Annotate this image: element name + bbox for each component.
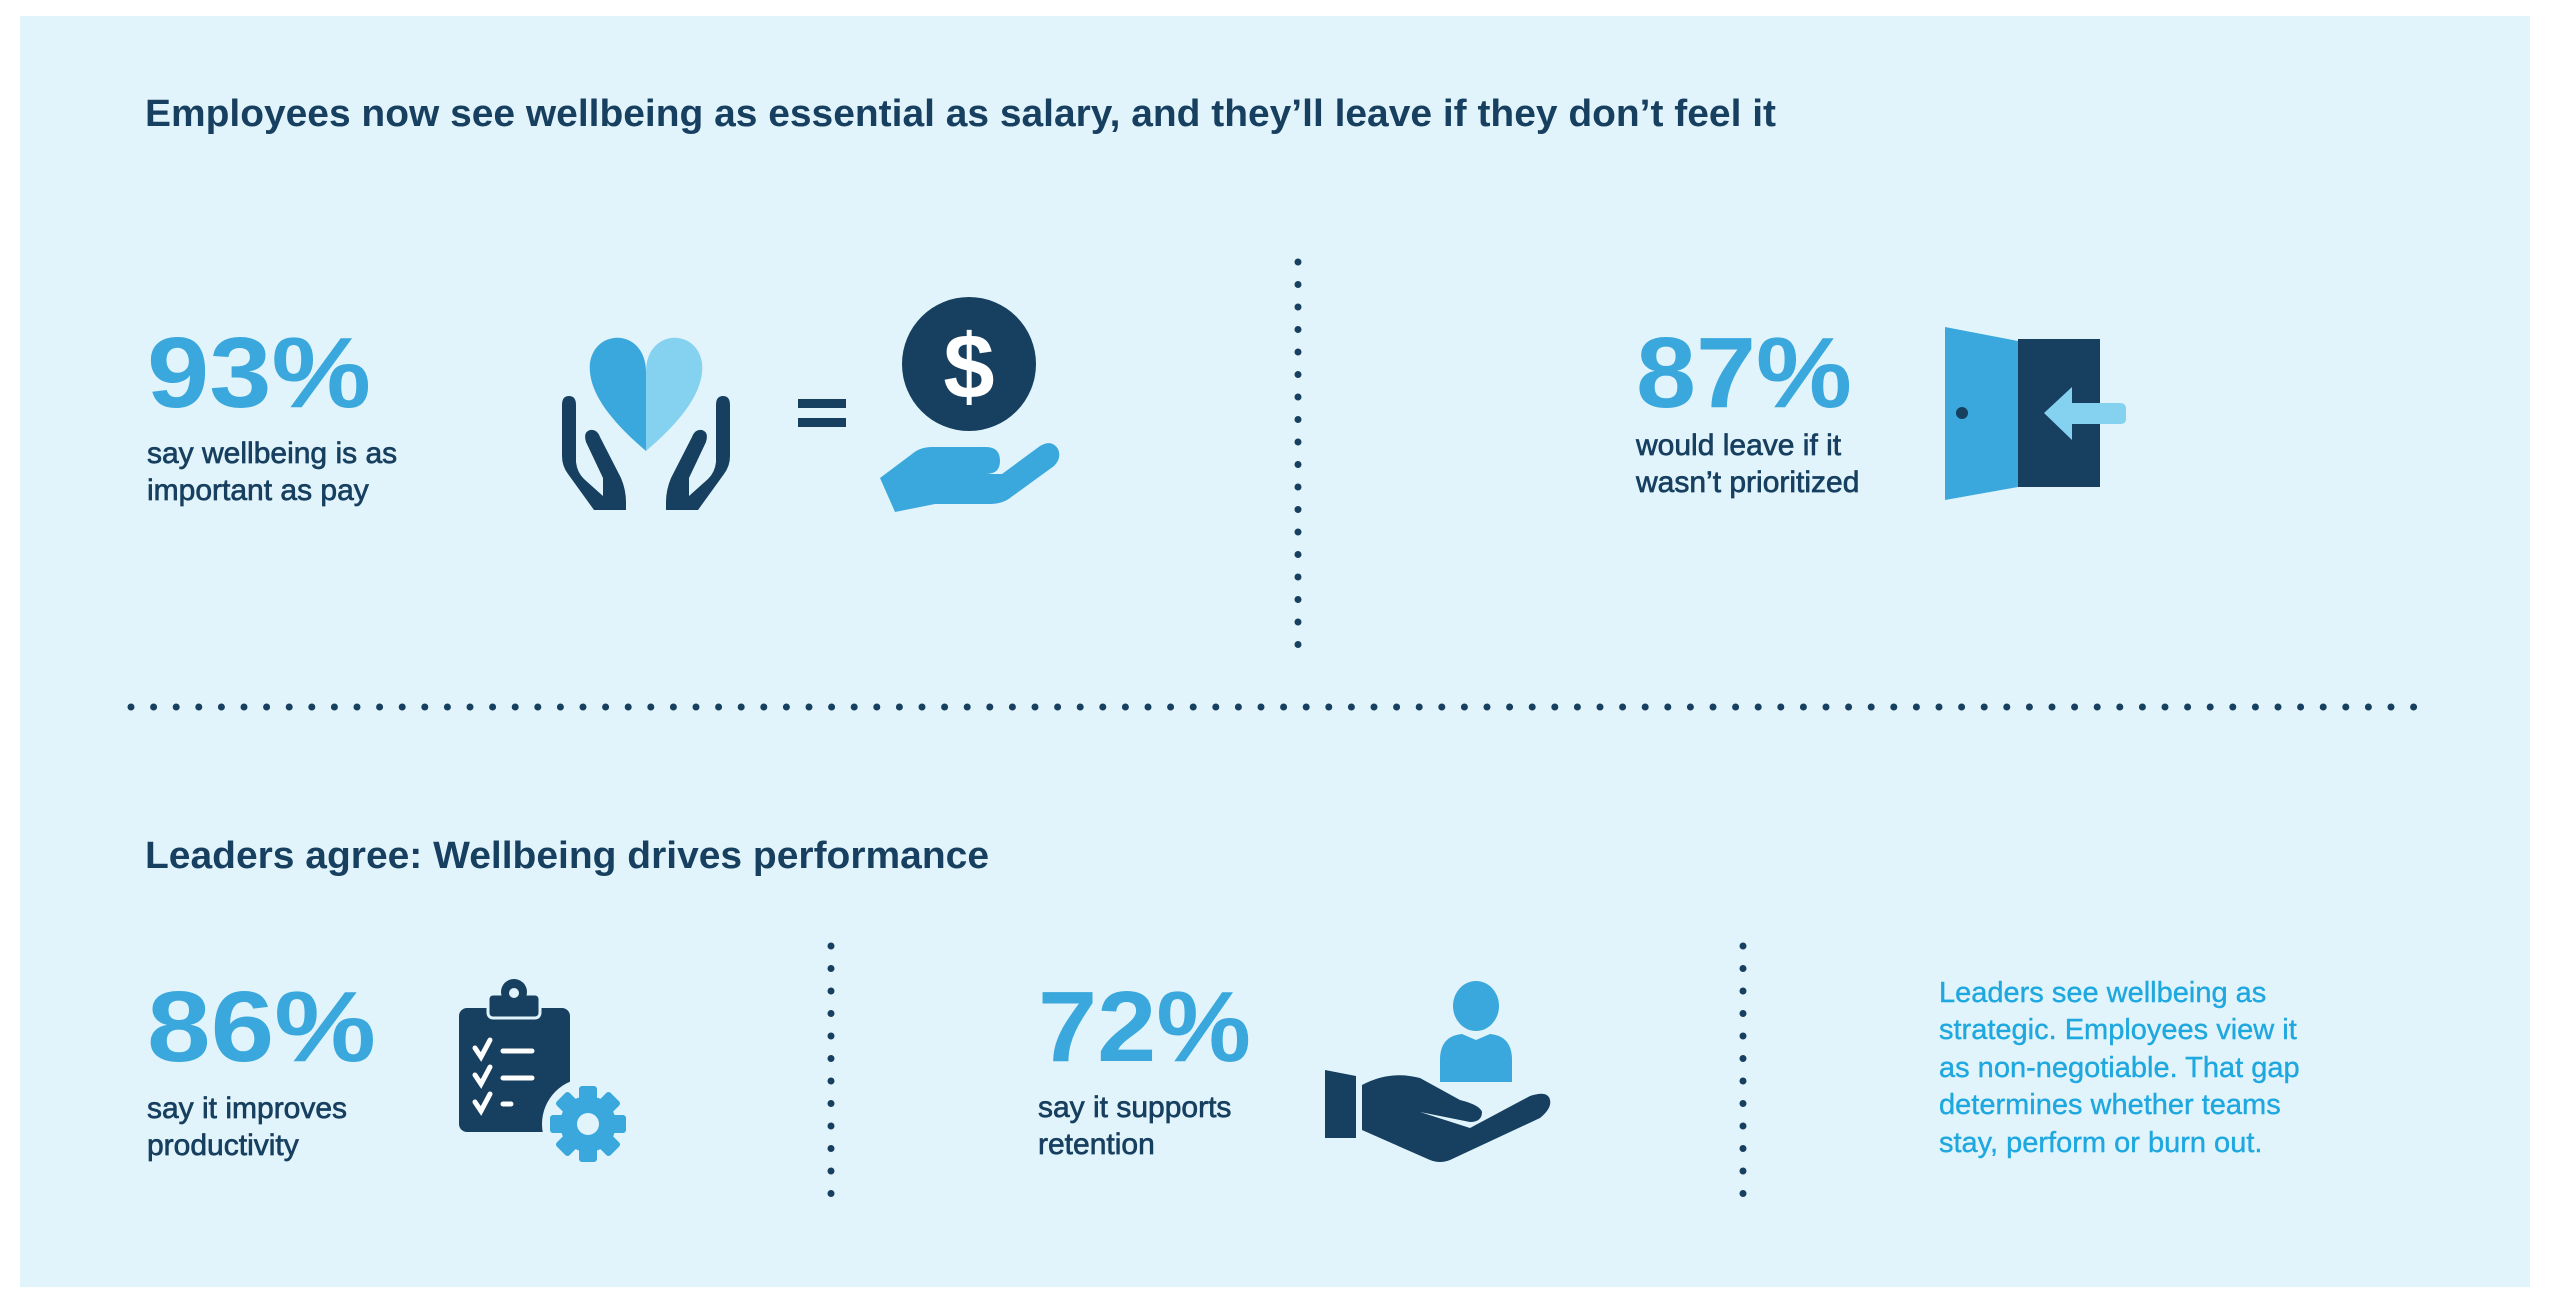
stat: 72% xyxy=(1038,971,1251,1161)
text block: leaders vs employees gap xyxy=(1939,977,2300,1159)
divider: vertical dotted top xyxy=(1294,262,1302,648)
stat: 87%: wasn’t prioritized xyxy=(1635,466,1859,499)
icon: hands holding heart xyxy=(562,338,730,510)
title: Employees now see wellbeing as essential as salary, and they’ll leave if they don’t feel it xyxy=(145,93,1776,135)
stat: 93%: say wellbeing is as xyxy=(147,437,397,470)
text block: leaders vs employees gap: Leaders see wellbeing as xyxy=(1939,977,2266,1009)
stat: 72%: 72% xyxy=(1038,971,1251,1083)
stat: 93%: important as pay xyxy=(147,474,369,507)
subtitle: Leaders agree: Wellbeing drives performance xyxy=(145,835,989,877)
text block: leaders vs employees gap: strategic. Employees view it xyxy=(1939,1014,2297,1046)
text block: leaders vs employees gap: as non-negotiable. That gap xyxy=(1939,1052,2300,1084)
icon: door with arrow xyxy=(1945,327,2126,500)
icon: clipboard with gear xyxy=(459,979,634,1170)
stat: 87%: 87% xyxy=(1636,317,1852,429)
icon: hand with coin xyxy=(880,297,1059,512)
stat: 86%: 86% xyxy=(147,971,376,1083)
stat: 87%: would leave if it xyxy=(1635,429,1842,462)
stat: 86%: say it improves xyxy=(147,1092,347,1125)
divider: horizontal dotted xyxy=(131,704,2428,710)
stat: 87% xyxy=(1635,317,1859,499)
divider: vertical dotted bottom right xyxy=(1740,946,1746,1202)
stat: 93% xyxy=(147,317,397,507)
divider: vertical dotted bottom left xyxy=(828,946,834,1202)
stat: 72%: retention xyxy=(1038,1128,1155,1161)
text block: leaders vs employees gap: stay, perform or burn out. xyxy=(1939,1127,2262,1159)
icon: equals xyxy=(798,399,846,427)
stat: 86% xyxy=(147,971,376,1162)
stat: 93%: 93% xyxy=(147,317,371,429)
stat: 86%: productivity xyxy=(147,1129,299,1162)
icon: hand with coin: $ xyxy=(943,316,995,418)
stat: 72%: say it supports xyxy=(1038,1091,1231,1124)
text block: leaders vs employees gap: determines whether teams xyxy=(1939,1089,2281,1121)
icon: hand holding person xyxy=(1325,981,1550,1162)
